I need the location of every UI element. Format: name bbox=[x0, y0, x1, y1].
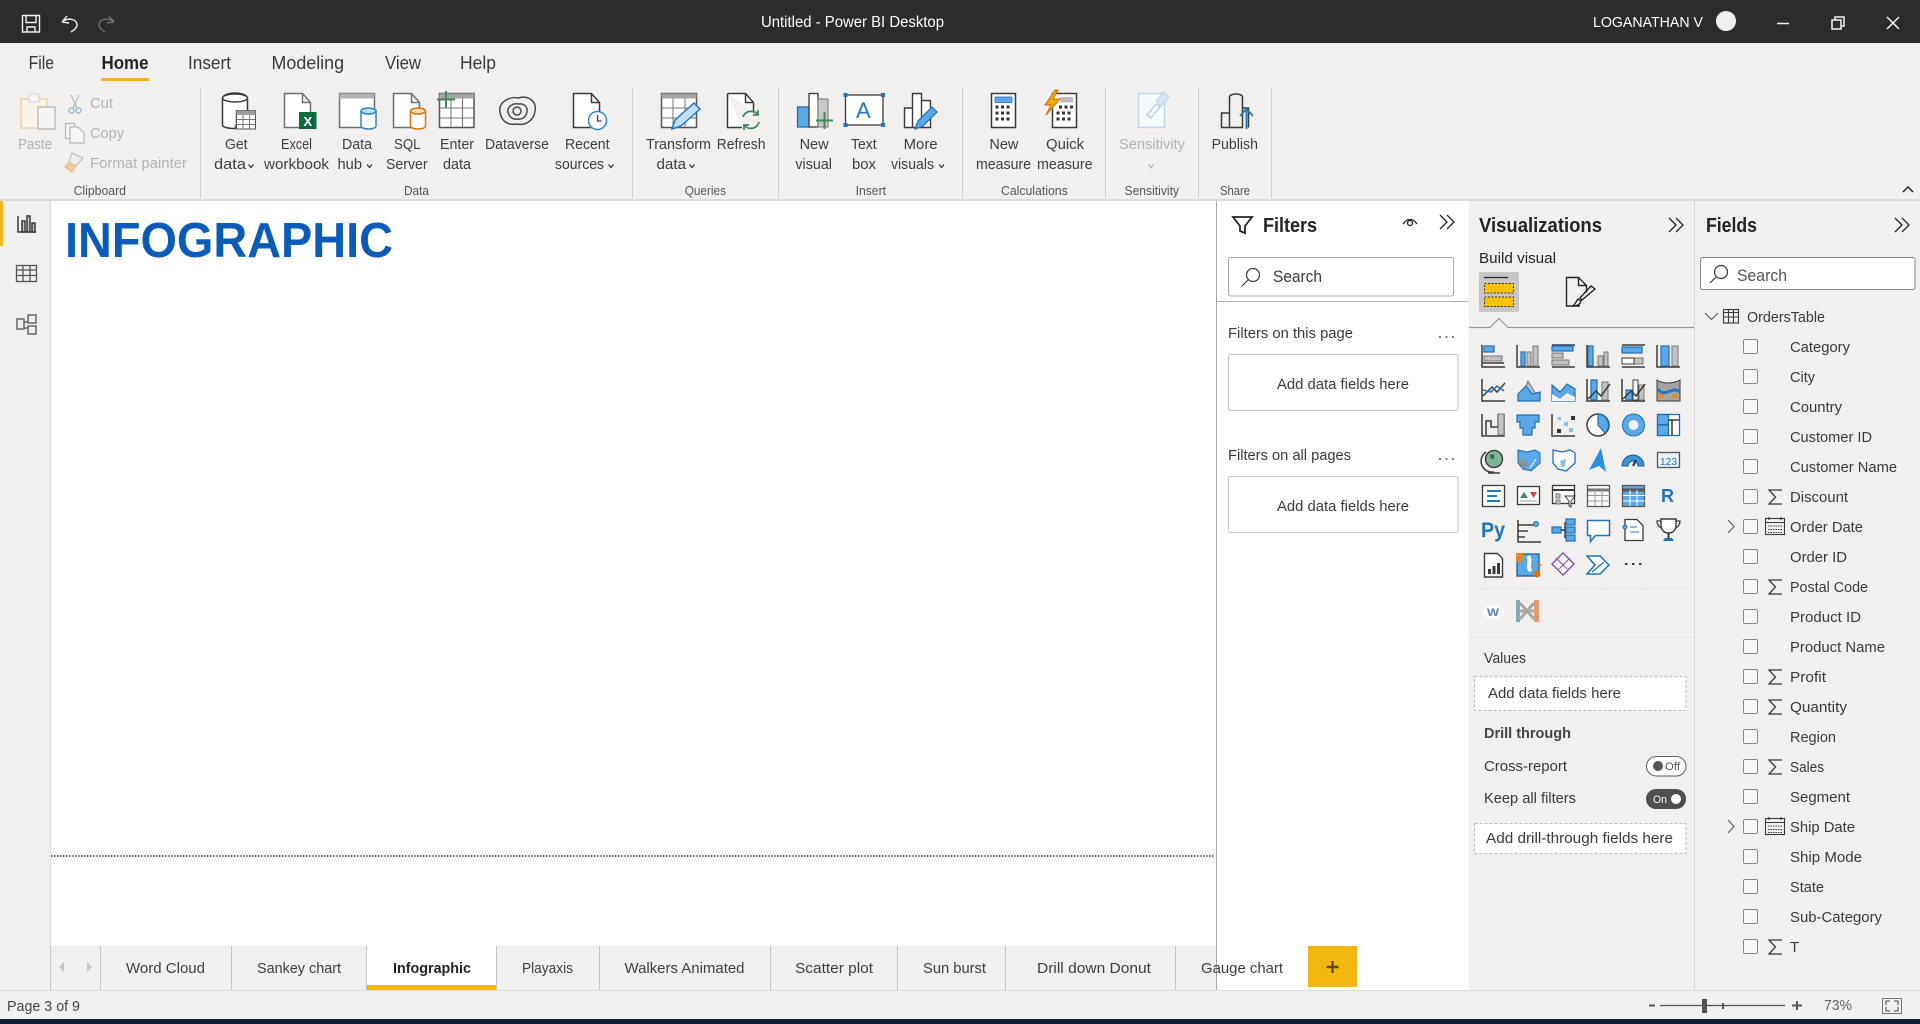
group label: clipboard: Clipboard bbox=[74, 183, 126, 198]
chevron bbox=[1148, 164, 1154, 168]
row 2 icons bbox=[1482, 379, 1680, 401]
icon: enter data bbox=[437, 91, 474, 128]
desktop strip bbox=[0, 1019, 1920, 1024]
toggle: off bbox=[1646, 756, 1686, 776]
heading: visualizations: Visualizations bbox=[1479, 215, 1602, 237]
row 5 icons bbox=[1482, 486, 1674, 507]
more dots bbox=[1439, 336, 1454, 338]
status bar bbox=[0, 990, 1920, 1019]
chevron bbox=[939, 164, 944, 168]
tab: playaxis: Playaxis bbox=[522, 960, 573, 977]
label: transform: Transform bbox=[646, 136, 711, 153]
label: cross-report: Cross-report bbox=[1484, 758, 1568, 775]
field names: Profit bbox=[1790, 669, 1827, 686]
field names: Country bbox=[1790, 399, 1842, 416]
zoom slider bbox=[1649, 999, 1802, 1013]
icon: excel workbook bbox=[284, 94, 316, 129]
row 6 icons bbox=[1481, 519, 1680, 542]
group label: queries: Queries bbox=[685, 183, 726, 198]
drop box: drill-through bbox=[1474, 824, 1686, 854]
icon: data view bbox=[16, 266, 36, 282]
row 4 icons: 123 bbox=[1660, 457, 1677, 468]
drop box: values: Add data fields here bbox=[1488, 685, 1621, 702]
tab: sun burst: Sun burst bbox=[923, 960, 987, 977]
field names: State bbox=[1790, 879, 1824, 896]
icon: sensitivity bbox=[1138, 92, 1169, 128]
label: filters on this page: Filters on this page bbox=[1228, 325, 1353, 342]
label: keep all filters: Keep all filters bbox=[1484, 790, 1576, 807]
group label: share: Share bbox=[1220, 183, 1250, 198]
label: values: Values bbox=[1484, 650, 1526, 667]
label: format painter: Format painter bbox=[90, 155, 187, 172]
window title: Untitled - Power BI Desktop bbox=[761, 14, 944, 31]
icon: transform data bbox=[662, 94, 700, 129]
field names: Customer ID bbox=[1790, 429, 1872, 446]
ribbon tabs bbox=[29, 53, 496, 81]
tab: infographic active: Infographic bbox=[393, 960, 471, 977]
icon: publish bbox=[1222, 94, 1253, 129]
label: text: Text bbox=[851, 136, 877, 153]
icon: quick measure bbox=[1045, 90, 1076, 128]
icon: data hub bbox=[340, 94, 376, 129]
label: workbook: workbook bbox=[263, 156, 329, 173]
icon: report view bbox=[18, 216, 36, 232]
tab: drill down donut: Drill down Donut bbox=[1037, 960, 1152, 977]
toggle: on: On bbox=[1653, 794, 1667, 806]
label: copy: Copy bbox=[90, 125, 124, 142]
group label: sensitivity: Sensitivity bbox=[1124, 183, 1179, 198]
icon: get data bbox=[222, 93, 256, 129]
label: enter: Enter bbox=[440, 136, 474, 153]
tab: word cloud: Word Cloud bbox=[126, 960, 205, 977]
label: measure: measure bbox=[976, 156, 1031, 173]
label: hub: hub bbox=[338, 156, 362, 173]
ribbon tabs: Help bbox=[460, 53, 496, 73]
icon: more visuals bbox=[904, 94, 937, 129]
label: excel: Excel bbox=[281, 136, 312, 153]
label: visuals: visuals bbox=[891, 156, 934, 173]
chevron bbox=[608, 164, 614, 168]
title bar bbox=[0, 0, 1920, 43]
chevron bbox=[248, 164, 254, 168]
more dots bbox=[1439, 458, 1454, 460]
icon: recent sources bbox=[574, 94, 606, 130]
icon: copy bbox=[66, 124, 84, 143]
icon: excel workbook: X bbox=[304, 114, 312, 129]
label: data dropdown: data bbox=[214, 156, 247, 173]
label: filters on all pages: Filters on all pages bbox=[1228, 447, 1351, 464]
ribbon separators bbox=[200, 88, 1272, 198]
tab: gauge chart: Gauge chart bbox=[1201, 960, 1284, 977]
data group bbox=[214, 91, 614, 198]
visual gallery bbox=[1480, 345, 1687, 622]
icon: save bbox=[22, 16, 40, 32]
icon: funnel bbox=[1233, 217, 1252, 233]
ribbon tabs: Insert bbox=[188, 53, 231, 73]
label: data: Data bbox=[342, 136, 373, 153]
icon: build visual selected bbox=[1479, 272, 1519, 312]
row 6 icons: Py bbox=[1481, 519, 1505, 542]
ribbon tabs: File bbox=[29, 53, 54, 73]
label: paste: Paste bbox=[18, 136, 52, 153]
panel: filters bbox=[1216, 201, 1469, 990]
queries group bbox=[646, 94, 766, 198]
label: new: New bbox=[989, 136, 1019, 153]
field names bbox=[1790, 339, 1897, 956]
field names: Sub-Category bbox=[1790, 909, 1882, 926]
search box bbox=[1700, 258, 1915, 290]
field names: Sales bbox=[1790, 759, 1824, 776]
row 7 icons bbox=[1484, 553, 1642, 578]
add page button bbox=[1308, 946, 1357, 987]
label: box: box bbox=[852, 156, 876, 173]
heading: filters: Filters bbox=[1263, 215, 1317, 237]
icon: tab scroll arrows bbox=[59, 962, 92, 972]
table node: orderstable bbox=[1705, 309, 1825, 326]
label: data: data bbox=[443, 156, 472, 173]
field names: Customer Name bbox=[1790, 459, 1897, 476]
zoom percent: 73% bbox=[1824, 997, 1852, 1014]
label: publish: Publish bbox=[1212, 136, 1258, 153]
icon: dataverse bbox=[500, 97, 535, 124]
icon: collapse chevrons bbox=[1669, 218, 1683, 232]
clipboard group bbox=[18, 94, 187, 198]
chevron bbox=[367, 164, 372, 168]
drop box: drill-through: Add drill-through fields here bbox=[1486, 830, 1673, 847]
label: drill through: Drill through bbox=[1484, 725, 1571, 742]
sensitivity group bbox=[1119, 92, 1185, 198]
icon: collapse chevrons bbox=[1895, 218, 1909, 232]
label: cut: Cut bbox=[90, 95, 114, 112]
icon: new visual bbox=[798, 94, 833, 129]
panel: visualizations bbox=[1469, 201, 1694, 990]
search box bbox=[1228, 258, 1454, 296]
label: quick: Quick bbox=[1046, 136, 1084, 153]
label: get data: Get bbox=[225, 136, 248, 153]
search box: Search bbox=[1273, 268, 1322, 286]
ribbon tabs: Modeling bbox=[272, 53, 344, 73]
heading: infographic: INFOGRAPHIC bbox=[65, 214, 393, 268]
icon: undo bbox=[62, 16, 77, 32]
user name: LOGANATHAN V bbox=[1593, 14, 1703, 31]
label: sql: SQL bbox=[394, 136, 420, 153]
label: more: More bbox=[904, 136, 938, 153]
label: sources: sources bbox=[555, 156, 604, 173]
label: refresh: Refresh bbox=[717, 136, 766, 153]
user avatar bbox=[1716, 11, 1736, 31]
icon: cut bbox=[69, 95, 81, 113]
ribbon tabs: Home bbox=[102, 53, 148, 73]
label: build visual: Build visual bbox=[1479, 251, 1556, 267]
icon: text box bbox=[844, 93, 885, 127]
share group bbox=[1212, 94, 1258, 198]
icon: collapse ribbon bbox=[1903, 187, 1913, 192]
label: dataverse: Dataverse bbox=[485, 136, 549, 153]
page indicator: Page 3 of 9 bbox=[7, 998, 80, 1015]
insert group bbox=[795, 93, 944, 198]
field checkboxes bbox=[1744, 340, 1758, 954]
panel: fields bbox=[1694, 201, 1915, 990]
field names: Postal Code bbox=[1790, 579, 1868, 596]
field names: City bbox=[1790, 369, 1815, 386]
drop box: filters on all pages: Add data fields here bbox=[1277, 498, 1409, 515]
chevron bbox=[690, 164, 694, 168]
icon: fit to page bbox=[1882, 998, 1902, 1014]
calculations group bbox=[976, 90, 1092, 198]
row 5 icons: R bbox=[1661, 486, 1674, 506]
icon: text box: A bbox=[856, 98, 871, 123]
label: sensitivity: Sensitivity bbox=[1119, 136, 1185, 153]
search box: Search bbox=[1737, 267, 1787, 285]
label: server: Server bbox=[386, 156, 428, 173]
row 8 custom visuals: W bbox=[1487, 607, 1500, 619]
field names: Segment bbox=[1790, 789, 1851, 806]
group label: data: Data bbox=[404, 183, 430, 198]
tab indicator line bbox=[1469, 318, 1694, 328]
date hierarchy icons bbox=[1728, 517, 1784, 834]
left rail bbox=[0, 201, 51, 946]
field names: Ship Mode bbox=[1790, 849, 1862, 866]
icon: collapse chevrons bbox=[1440, 215, 1454, 229]
group label: calculations: Calculations bbox=[1001, 183, 1068, 198]
tab: walkers animated: Walkers Animated bbox=[624, 960, 744, 977]
field names: Order Date bbox=[1790, 519, 1863, 536]
field names: Discount bbox=[1790, 489, 1849, 506]
row 3 icons bbox=[1482, 414, 1680, 436]
tab: infographic active bbox=[367, 946, 496, 990]
drop box: filters on this page: Add data fields here bbox=[1277, 376, 1409, 393]
table node: orderstable: OrdersTable bbox=[1747, 309, 1825, 326]
toggle: off: Off bbox=[1665, 761, 1681, 773]
field names: Product Name bbox=[1790, 639, 1885, 656]
toggle: on bbox=[1646, 789, 1686, 809]
icon: redo bbox=[99, 16, 114, 32]
tab: sankey chart: Sankey chart bbox=[257, 960, 342, 977]
drop box: filters on all pages bbox=[1228, 476, 1458, 532]
icon: sql server bbox=[394, 94, 426, 129]
icon: paste bbox=[21, 94, 55, 129]
group label: insert: Insert bbox=[856, 183, 886, 198]
field names: Product ID bbox=[1790, 609, 1861, 626]
field names: Ship Date bbox=[1790, 819, 1855, 836]
field names: Category bbox=[1790, 339, 1850, 356]
tab: scatter plot: Scatter plot bbox=[795, 960, 874, 977]
label: visual: visual bbox=[795, 156, 832, 173]
icon: format painter bbox=[65, 153, 83, 172]
drop box: filters on this page bbox=[1228, 354, 1458, 410]
icon: refresh bbox=[728, 94, 759, 130]
icon: new measure bbox=[992, 94, 1016, 128]
field names: Quantity bbox=[1790, 699, 1847, 716]
icon: format visual bbox=[1566, 278, 1595, 306]
page boundary dotted line bbox=[51, 855, 1215, 857]
label: recent: Recent bbox=[565, 136, 610, 153]
field names: Order ID bbox=[1790, 549, 1847, 566]
icon: eye bbox=[1403, 220, 1417, 226]
drop box: values bbox=[1474, 676, 1686, 710]
label: data: data bbox=[656, 156, 687, 173]
heading: fields: Fields bbox=[1706, 215, 1757, 237]
label: measure: measure bbox=[1037, 156, 1092, 173]
page tabs bar bbox=[50, 946, 1357, 990]
row 4 icons bbox=[1481, 448, 1680, 473]
row 8 custom visuals bbox=[1482, 600, 1539, 622]
row 1 icons bbox=[1482, 345, 1680, 367]
label: new: New bbox=[800, 136, 829, 153]
sigma icons bbox=[1769, 490, 1782, 954]
field names: T bbox=[1790, 939, 1799, 956]
window controls bbox=[1777, 17, 1899, 29]
icon: model view bbox=[17, 315, 36, 334]
ribbon tabs: View bbox=[385, 53, 422, 73]
field names: Region bbox=[1790, 729, 1836, 746]
